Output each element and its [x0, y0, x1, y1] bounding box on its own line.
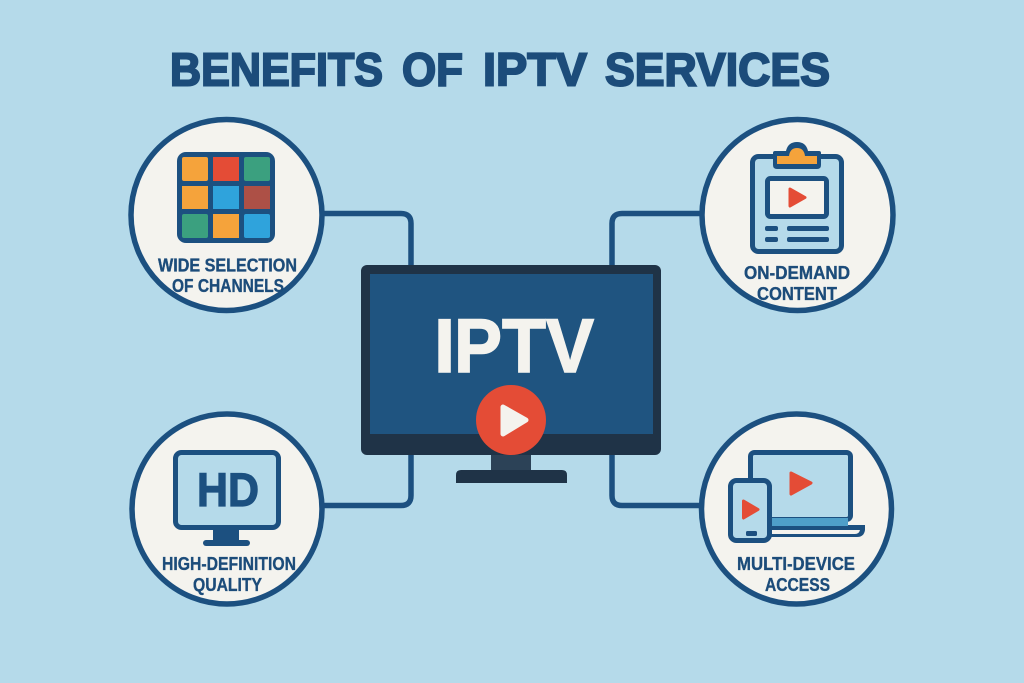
IPTV label: PTV — [454, 304, 594, 389]
icon: HD monitor: HD — [197, 463, 259, 516]
title: SERVICES — [605, 44, 830, 96]
IPTV label: I — [434, 304, 455, 389]
icon: HD monitor — [176, 452, 278, 546]
title — [170, 44, 830, 96]
play button — [476, 385, 546, 455]
label: WIDE SELECTION — [158, 256, 297, 276]
TV frame — [361, 265, 661, 455]
title: BENEFITS — [170, 44, 383, 96]
label: ON-DEMAND — [744, 263, 850, 283]
TV screen — [370, 274, 653, 434]
label: CONTENT — [757, 284, 837, 304]
title: IPTV — [483, 44, 587, 96]
label — [162, 554, 296, 595]
label: HIGH-DEFINITION — [162, 554, 296, 574]
panel: wide selection of channels — [131, 120, 322, 310]
panel: high-definition quality — [132, 414, 322, 604]
label: MULTI-DEVICE — [737, 554, 855, 574]
label: OF CHANNELS — [172, 276, 284, 296]
label: QUALITY — [193, 575, 262, 595]
icon: clipboard with video — [752, 142, 842, 252]
connectors — [322, 214, 701, 506]
TV stand — [456, 454, 567, 483]
icon: channel grid — [177, 152, 275, 243]
panel: on-demand content — [702, 120, 893, 310]
panel: multi-device access — [702, 414, 892, 604]
label — [737, 554, 855, 595]
title: OF — [402, 44, 463, 96]
central TV — [361, 265, 661, 483]
label: ACCESS — [765, 575, 830, 595]
label — [744, 263, 850, 304]
icon: laptop and phone — [730, 452, 865, 540]
label — [158, 256, 297, 296]
